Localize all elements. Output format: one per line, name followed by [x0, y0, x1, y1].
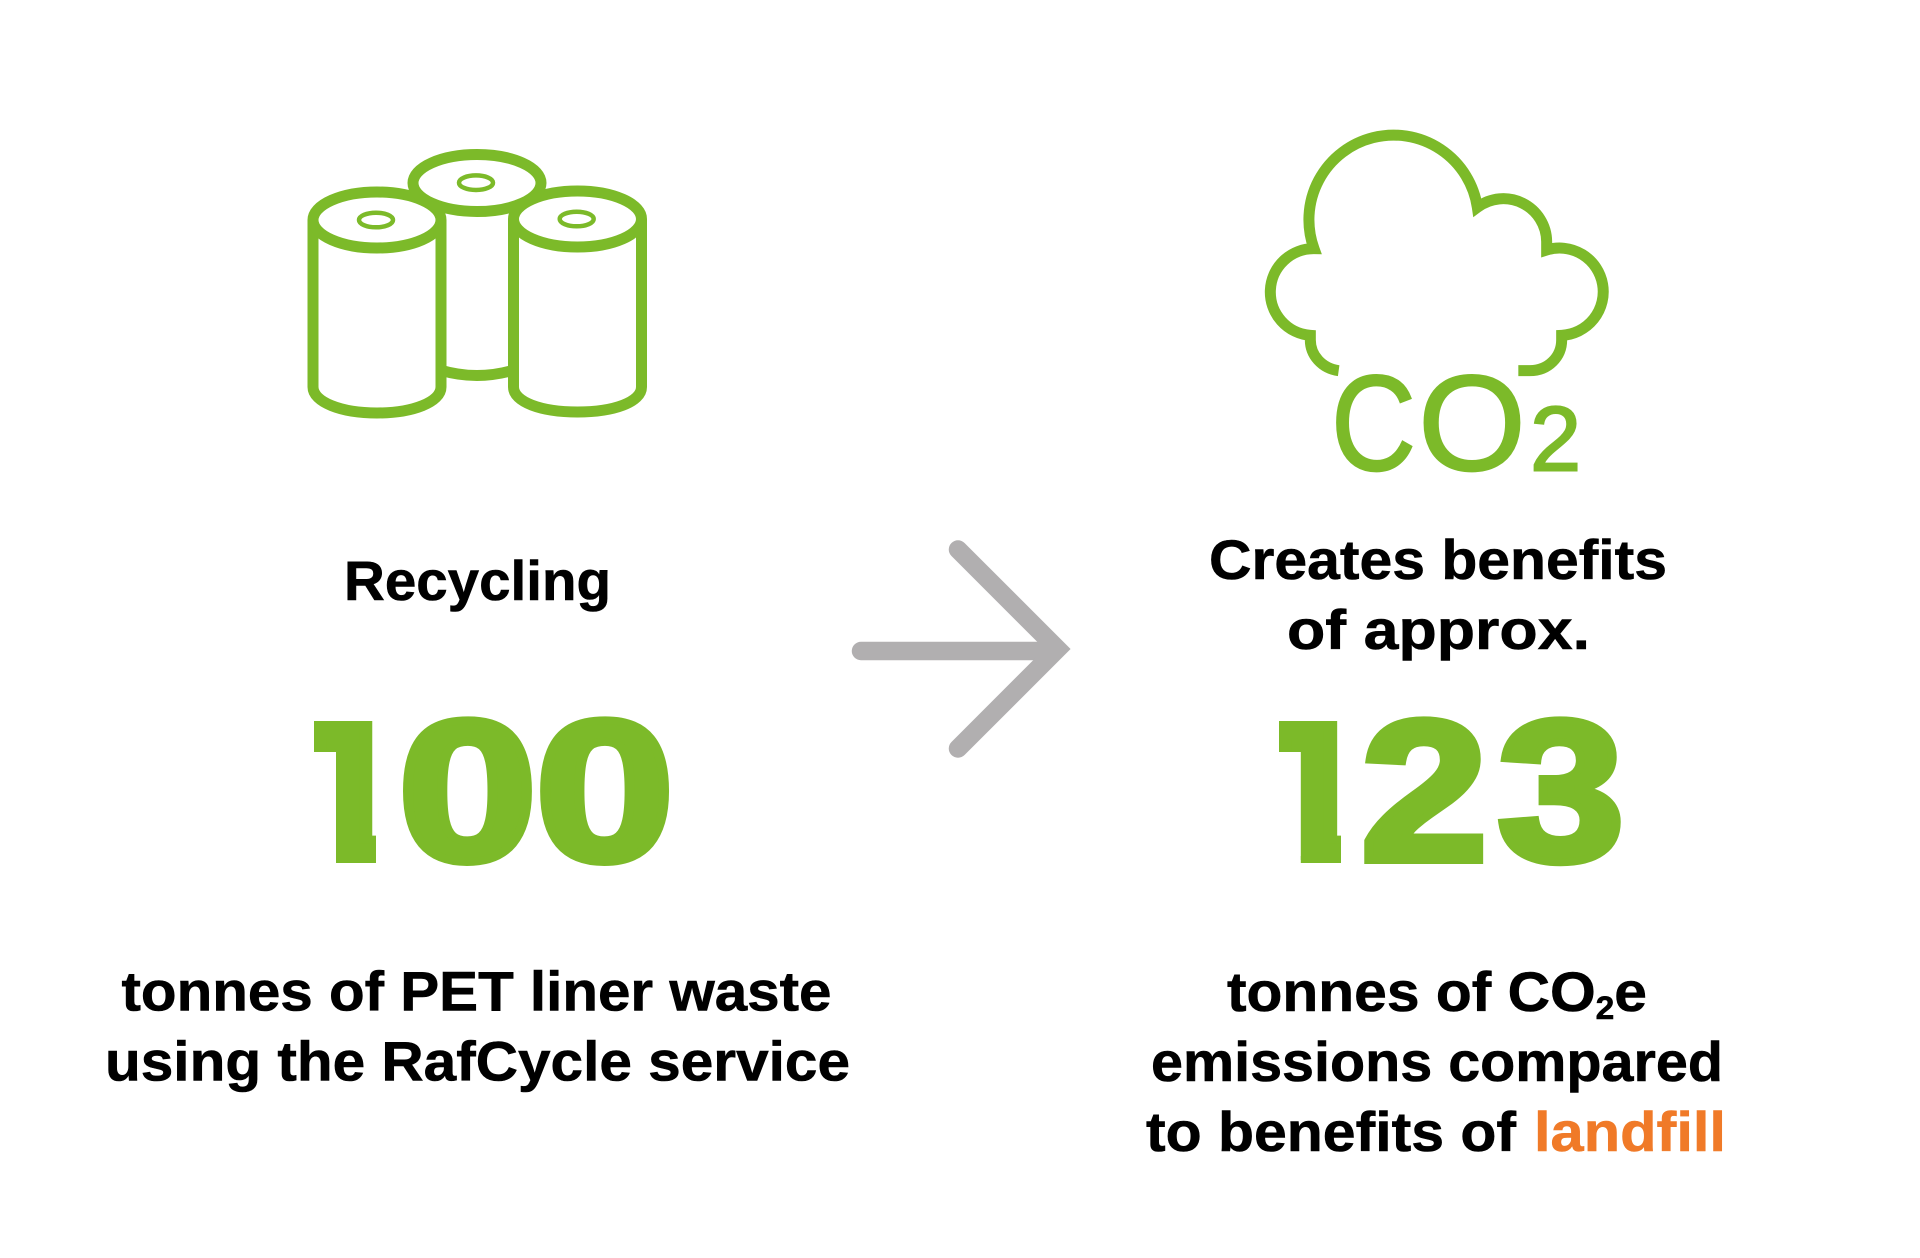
icon label: CO2: O: [1418, 347, 1526, 499]
number: 123: 23: [1361, 680, 1624, 903]
cloud outline: [1270, 135, 1603, 371]
panel: benefits: [1146, 135, 1726, 1163]
heading: creates benefits of approx.: Creates benefits: [1209, 528, 1667, 591]
text: tonnes of PET liner waste: [105, 960, 850, 1092]
text: tonnes of CO2e emissions compared to benefits of landfill: e: [1614, 960, 1647, 1023]
text: tonnes of CO2e emissions compared to benefits of landfill: landfill: [1534, 1100, 1726, 1163]
number: 100: 00: [398, 679, 674, 902]
number: 100: [314, 716, 670, 866]
text: tonnes of PET liner waste: using the RafCycle service: [105, 1030, 850, 1092]
icon label: CO2: 2: [1530, 388, 1581, 490]
arrow: [861, 550, 1058, 748]
icon label: CO2: C: [1331, 347, 1416, 499]
number: 123: [1279, 716, 1621, 866]
infographic canvas: [108, 130, 1722, 1152]
heading: creates benefits of approx.: [1209, 528, 1667, 661]
text: tonnes of PET liner waste: tonnes of PET liner waste: [122, 960, 832, 1022]
heading: creates benefits of approx.: of approx.: [1287, 598, 1590, 661]
text: tonnes of CO2e emissions compared to benefits of landfill: 2: [1596, 990, 1614, 1026]
text: tonnes of CO2e emissions compared to benefits of landfill: to benefits of: [1146, 1100, 1516, 1163]
icon: CO2 cloud: [1270, 135, 1603, 499]
number: 100: 1: [243, 679, 427, 903]
icon: three rolls of liner: [313, 154, 642, 413]
panel: recycling: [105, 154, 850, 1092]
text: tonnes of CO2e emissions compared to benefits of landfill: tonnes of CO: [1227, 960, 1579, 1023]
number: 123: 1: [1208, 679, 1392, 903]
text: tonnes of CO2e emissions compared to benefits of landfill: emissions compared: [1151, 1030, 1723, 1093]
text: tonnes of CO2e emissions compared to benefits of landfill: [1146, 960, 1726, 1163]
heading: recycling: Recycling: [344, 549, 611, 612]
